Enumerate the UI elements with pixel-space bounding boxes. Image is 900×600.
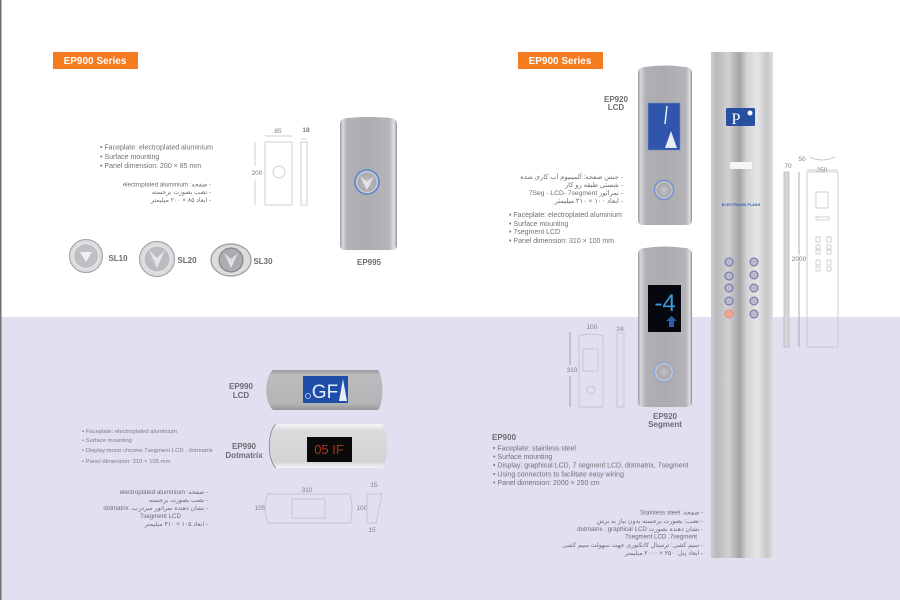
text block: EP920 LCD English specs — [509, 212, 622, 245]
text block: EP995 Persian specs: - ابعاد ۸۵ × ۲۰۰ میلیمتر — [150, 197, 211, 204]
text block: EP990 English specs: • Panel dimension: 310 × 105 mm — [82, 459, 170, 465]
product: EP990 LCD panel — [266, 370, 382, 410]
label: EP920 LCD: EP920 — [604, 95, 629, 104]
text block: EP900 Persian specs: - نصب: بصورت برجسته بدون نیاز به برش — [597, 518, 703, 525]
text block: EP900 Persian specs: - نشان دهنده بصورت dotmatrix , graphical LCD — [577, 526, 703, 533]
text block: EP920 LCD Persian specs — [520, 172, 623, 205]
icon: parking sign — [726, 108, 755, 128]
dimension drawing: EP920: 100 — [587, 324, 598, 331]
label: EP920 Segment: Segment — [648, 420, 682, 429]
text block: EP990 Persian specs: - ابعاد ۱۰۵ × ۳۱۰ میلیمتر — [144, 521, 208, 528]
text block: EP900 Persian specs: - صفحه: Stainless steel — [640, 510, 703, 516]
product: EP920 Segment panel — [638, 246, 692, 407]
button: SL30: SL30 — [253, 257, 273, 266]
text block: EP990 English specs: • Surface mounting — [82, 438, 132, 444]
dimension drawing: EP900 pillar: 70 — [784, 163, 792, 170]
dimension drawing: EP920 — [567, 324, 624, 407]
label: EP990 LCD — [229, 382, 254, 400]
product: EP990 Dotmatrix panel: 05 IF — [314, 442, 344, 457]
dimension drawing: EP995: 200 — [252, 170, 263, 177]
text block: EP900 English specs — [492, 433, 688, 487]
text block: EP900 English specs: • Using connectors to facilitate easy wiring — [493, 472, 624, 478]
text block: EP995 Persian specs: - صفحه: electroplated aluminium — [123, 182, 211, 188]
product: EP990 LCD panel: GF — [312, 382, 338, 403]
left heading tag: EP900 Series: EP900 Series — [64, 56, 127, 67]
dimension drawing: EP900 pillar: 50 — [798, 156, 806, 163]
lower background band — [0, 317, 900, 600]
text block: EP900 Persian specs: - سیم کشی: ترمینال کانکتوری جهت سهولت سیم کشی — [562, 542, 703, 549]
label: EP990 LCD: LCD — [233, 391, 249, 400]
text block: EP990 Persian specs: - نصب بصورت برجسته — [149, 497, 208, 504]
label: EP920 Segment — [648, 412, 682, 429]
text block: EP990 English specs: • Display:mono chrome 7segment LCD , dotmatrix — [82, 448, 213, 454]
text block: EP990 Persian specs — [103, 489, 208, 528]
text block: EP995 English specs: • Surface mounting — [100, 154, 159, 161]
pillar button columns — [725, 258, 758, 318]
text block: EP990 English specs: • Faceplate: electroplated aluminium — [82, 429, 177, 435]
text block: EP995 English specs — [100, 144, 213, 170]
label: EP990 Dotmatrix: Dotmatrix — [225, 451, 263, 460]
text block: EP920 LCD English specs: • 7segment LCD — [509, 229, 560, 236]
text block: EP900 Persian specs: - ابعاد پنل: ۲۵۰ × ۲۰۰۰ میلیمتر — [624, 550, 703, 557]
text block: EP900 English specs: • Display: graphical LCD, 7 segment LCD, dotmatrix, 7segment — [493, 462, 688, 470]
text block: EP900 English specs: EP900 — [492, 433, 517, 442]
button: SL20: SL20 — [177, 256, 197, 265]
dimension drawing: EP900 pillar: 2000 — [792, 256, 807, 263]
dimension drawing: EP990: 100 — [357, 505, 368, 512]
text block: EP990 Persian specs: - صفحه: electroplated aluminium — [120, 489, 208, 496]
button: SL10: SL10 — [108, 254, 128, 263]
text block: EP990 Persian specs: 7segment LCD — [140, 513, 182, 520]
right heading tag: EP900 Series — [518, 52, 603, 69]
label: EP990 Dotmatrix: EP990 — [232, 442, 257, 451]
dimension drawing: EP920: 24 — [616, 326, 624, 333]
text block: EP900 Persian specs: 7segment LCD ,7segment — [625, 534, 697, 540]
icon: parking sign: P — [732, 111, 741, 128]
left heading tag: EP900 Series — [53, 52, 138, 69]
button: SL20 — [140, 242, 197, 276]
text block: EP900 English specs: • Surface mounting — [493, 454, 552, 461]
label: EP990 Dotmatrix — [225, 442, 263, 460]
button: SL30 — [211, 244, 273, 276]
dimension drawing: EP920: 310 — [567, 367, 578, 374]
label: EP995: EP995 — [357, 258, 382, 267]
product: EP920 Segment panel: -4 — [654, 290, 676, 317]
text block: EP990 English specs — [82, 429, 213, 465]
dimension drawing: EP990: 105 — [255, 505, 266, 512]
dimension drawing: EP990: 310 — [302, 487, 313, 494]
text block: EP920 LCD Persian specs: - ابعاد ۱۰۰ × ۳۱۰ میلیمتر — [554, 198, 623, 205]
dimension drawing: EP990 — [255, 482, 382, 534]
dimension drawing: EP995: 18 — [302, 127, 310, 134]
product: EP920 LCD panel — [638, 66, 692, 225]
dimension drawing: EP990: 15 — [368, 527, 376, 534]
pillar display slot — [730, 162, 752, 169]
text block: EP900 Persian specs — [562, 510, 703, 557]
dimension drawing: EP995: 85 — [274, 128, 282, 135]
text block: EP900 English specs: • Faceplate: stainless steel — [493, 446, 576, 452]
text block: EP920 LCD English specs: • Surface mounting — [509, 221, 568, 228]
right heading tag: EP900 Series: EP900 Series — [529, 56, 592, 67]
text block: EP995 Persian specs — [123, 182, 211, 204]
product: EP995 panel — [340, 117, 397, 250]
label: EP920 LCD: LCD — [608, 103, 624, 112]
label: EP920 LCD — [604, 95, 629, 112]
text block: EP920 LCD English specs: • Faceplate: electroplated aluminium — [509, 212, 622, 219]
dimension drawing: EP900 pillar — [784, 156, 838, 347]
dimension drawing: EP990: 15 — [370, 482, 378, 489]
text block: EP920 LCD Persian specs: - جنس صفحه: آلمینیوم آب کاری شده — [520, 172, 623, 181]
dimension drawing: EP995 — [252, 127, 310, 205]
label: EP990 LCD: EP990 — [229, 382, 254, 391]
button: SL10 — [70, 240, 128, 272]
dimension drawing: EP900 pillar: 250 — [817, 167, 828, 174]
text block: EP995 English specs: • Faceplate: electroplated aluminium — [100, 144, 213, 152]
label: EP920 Segment: EP920 — [653, 412, 678, 421]
text block: EP990 Persian specs: - نشان دهنده نمراتور سردرب، dotmatrix — [103, 505, 208, 512]
text block: EP920 LCD Persian specs: - نمراتور 7Seg - LCD- 7segment — [529, 190, 623, 197]
text block: EP900 English specs: • Panel dimension: 2000 × 250 cm — [493, 480, 600, 487]
text block: EP920 LCD Persian specs: - شستی طبقه رو کار — [564, 181, 623, 189]
product: EP990 Dotmatrix panel — [269, 424, 387, 468]
product: EP900 pillar panel — [711, 52, 773, 558]
text block: EP995 English specs: • Panel dimension: 200 × 85 mm — [100, 163, 201, 170]
text block: EP995 Persian specs: - نصب بصورت برجسته — [152, 189, 211, 196]
pillar brand text: ELECTRONIC FLASH — [722, 203, 760, 207]
text block: EP920 LCD English specs: • Panel dimension: 310 × 100 mm — [509, 238, 614, 245]
